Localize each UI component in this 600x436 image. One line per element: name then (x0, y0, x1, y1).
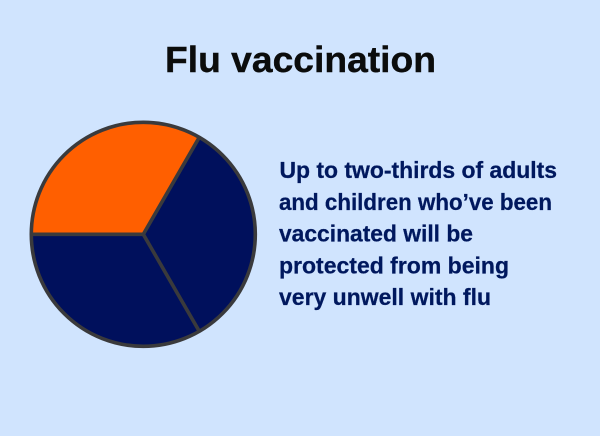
description text: protected from being (279, 252, 509, 278)
title: Flu vaccination (165, 39, 436, 80)
pie slice: orange one third (31, 122, 199, 234)
pie slice: navy lower third (31, 234, 199, 346)
description text: and children who’ve been (279, 189, 552, 215)
pie slice: navy upper right third (143, 137, 255, 331)
pie chart: two-thirds protected (31, 122, 255, 346)
description text (279, 157, 557, 310)
description text: Up to two-thirds of adults (280, 157, 557, 183)
description text: very unwell with flu (279, 284, 491, 310)
description text: vaccinated will be (279, 220, 473, 246)
pie outline and dividers (31, 122, 255, 346)
